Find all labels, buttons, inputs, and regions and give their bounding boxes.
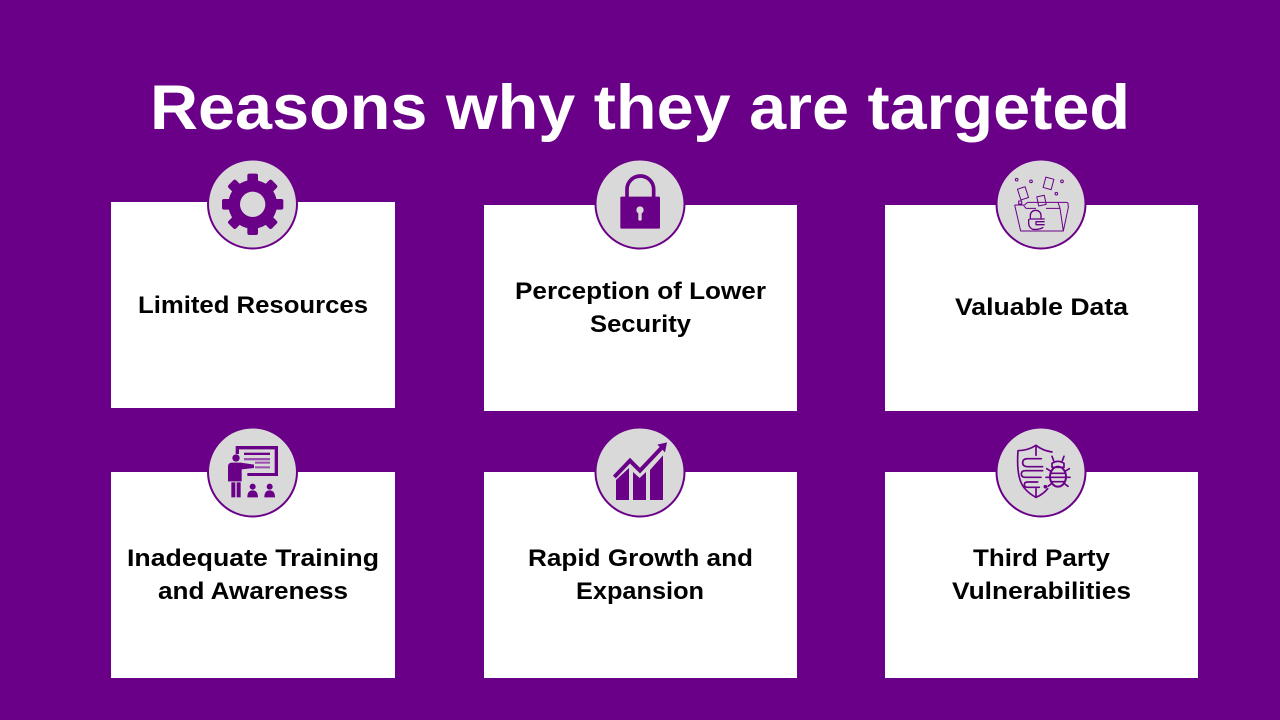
icon badge circle	[996, 428, 1086, 516]
panel: limited resources	[111, 160, 395, 408]
label: Valuable Data	[955, 294, 1129, 321]
card background	[111, 472, 395, 678]
panel: third party vulnerabilities	[885, 428, 1198, 678]
panel: perception of lower security	[484, 160, 797, 411]
card background	[885, 472, 1198, 678]
panel: third party vulnerabilities: Vulnerabilities	[952, 578, 1131, 605]
icon: rising bar chart with arrow	[614, 442, 667, 500]
icon: shield with bug	[1018, 445, 1070, 497]
label: Perception of Lower	[515, 278, 766, 305]
panel: valuable data	[885, 160, 1198, 411]
panel: rapid growth and expansion: Expansion	[576, 578, 704, 605]
label: Inadequate Training	[127, 545, 379, 572]
icon badge circle	[208, 428, 297, 516]
panel: inadequate training and awareness	[111, 428, 395, 678]
label: Third Party	[973, 545, 1111, 572]
icon badge circle	[596, 428, 684, 516]
icon: presenter at board	[228, 446, 278, 497]
panel: inadequate training and awareness: and Awareness	[158, 578, 348, 605]
panel: rapid growth and expansion	[484, 428, 797, 678]
card background	[111, 202, 395, 408]
label: Limited Resources	[138, 292, 368, 319]
icon badge circle	[208, 160, 297, 248]
icon: folder with lock and files	[1015, 177, 1068, 231]
title: Reasons why they are targeted	[150, 73, 1130, 143]
icon badge circle	[596, 160, 684, 248]
label: Rapid Growth and	[528, 545, 753, 572]
card background	[484, 205, 797, 411]
icon badge circle	[996, 160, 1086, 248]
icon: padlock	[620, 176, 660, 229]
panel: perception of lower security: Security	[590, 311, 692, 338]
icon: gear	[222, 174, 283, 235]
card background	[885, 205, 1198, 411]
card background	[484, 472, 797, 678]
